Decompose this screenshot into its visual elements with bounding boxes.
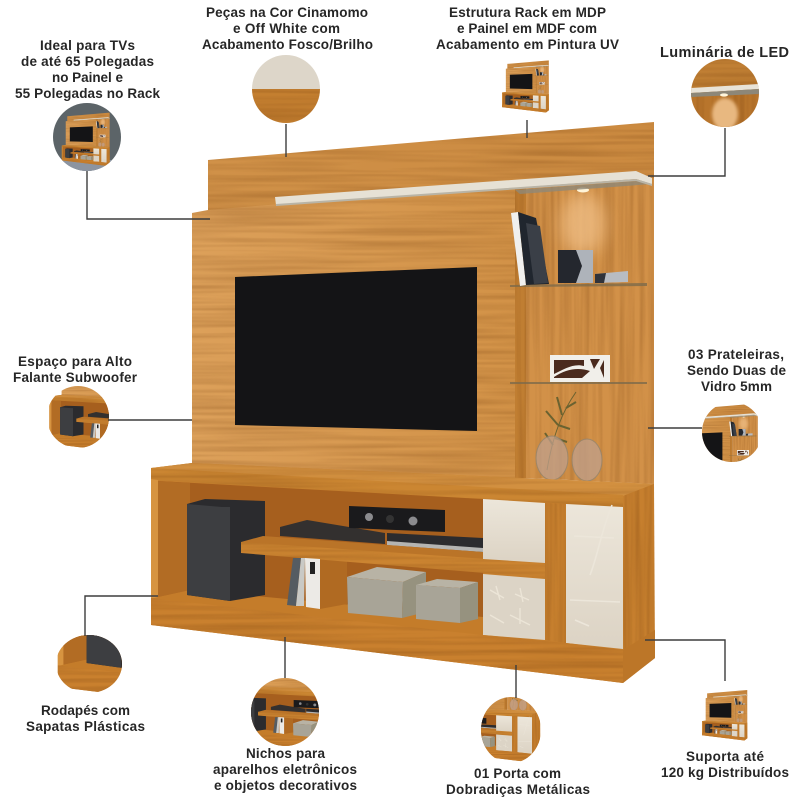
heading: 55 Polegadas no Rack: [15, 86, 160, 101]
books: [287, 558, 320, 609]
center speaker: [349, 506, 445, 532]
callout: Espaço para Alto Falante: [14, 356, 192, 448]
leader line: [285, 124, 287, 157]
heading: [661, 749, 789, 780]
base side: [623, 630, 655, 683]
shelves detail circle: [702, 404, 758, 462]
patterned box on lower shelf: [550, 355, 610, 382]
heading: Nichos para: [246, 746, 325, 761]
LED white shelf: [275, 171, 652, 206]
central divider: [320, 558, 347, 609]
furniture: TV panel and rack: [151, 122, 655, 683]
heading: e objetos decorativos: [214, 778, 357, 793]
glass vases: [536, 436, 602, 481]
leader line: [515, 665, 517, 698]
rack interior back: [158, 481, 483, 632]
lower wood panel: [192, 186, 516, 478]
callout: Peças na Cor Cinamomo: [202, 5, 373, 157]
LED light glow: [561, 188, 605, 256]
heading: aparelhos eletrônicos: [213, 762, 357, 777]
rack interior left wall: [158, 481, 190, 597]
shelf niche side strip: [515, 188, 526, 478]
storage box small: [416, 579, 478, 623]
subwoofer detail circle: [49, 386, 109, 448]
subwoofer: [187, 499, 265, 601]
heading: Falante Subwoofer: [13, 370, 138, 385]
centre shelf: [241, 536, 545, 578]
callout: Luminária de LED: [648, 45, 789, 176]
heading: e Off White com: [233, 21, 340, 36]
leader line: [645, 640, 725, 681]
heading: Suporta até: [686, 749, 764, 764]
heading: Rodapés com: [41, 703, 130, 718]
upper glass shelf: [510, 283, 647, 287]
cabinet side panel: [623, 484, 654, 650]
leader line: [108, 419, 192, 421]
media player: [280, 520, 483, 552]
product thumbnail: [502, 60, 549, 113]
callout: Ideal para TVs: [15, 38, 210, 219]
upper door: [483, 499, 545, 563]
leader line: [648, 427, 702, 429]
leader line: [284, 637, 286, 678]
upper wood panel: [208, 122, 654, 212]
heading: Luminária de LED: [660, 45, 789, 61]
heading: no Painel e: [52, 70, 123, 85]
heading: Dobradiças Metálicas: [446, 782, 590, 797]
lower glass shelf: [510, 382, 647, 384]
decorative vase block: [558, 250, 628, 283]
heading: 01 Porta com: [474, 766, 561, 781]
TV screen: [235, 267, 477, 431]
heading: Sendo Duas de: [687, 363, 786, 378]
heading: 03 Prateleiras,: [688, 347, 784, 362]
leader line: [648, 128, 725, 176]
leader line: [85, 596, 158, 636]
door detail circle: [481, 697, 540, 762]
base front: [151, 598, 623, 683]
callout: Nichos: [213, 637, 356, 793]
LED detail circle: [690, 58, 760, 130]
heading: [13, 354, 138, 385]
heading: [687, 347, 786, 394]
heading: Estrutura Rack em MDP: [449, 5, 606, 20]
photo circle: [53, 103, 121, 171]
heading: Sapatas Plásticas: [26, 719, 145, 734]
heading: Peças na Cor Cinamomo: [206, 5, 368, 20]
leader line: [526, 120, 528, 138]
rack floor: [151, 590, 483, 636]
finish sample circle: [250, 55, 322, 125]
callout: Suporta até: [645, 640, 789, 780]
callout: Rodapés: [26, 595, 158, 734]
callout: 01 Porta: [446, 665, 590, 797]
heading: Espaço para Alto: [18, 354, 132, 369]
heading: de até 65 Polegadas: [21, 54, 154, 69]
shelf niche back: [526, 178, 654, 484]
heading: [202, 5, 373, 52]
plant: [545, 392, 576, 470]
storage box large: [347, 567, 426, 618]
rack left edge: [151, 479, 158, 598]
heading: [15, 38, 160, 101]
heading: Acabamento Fosco/Brilho: [202, 37, 373, 52]
heading: [436, 5, 619, 52]
callout: Estrutura Rack: [436, 5, 619, 138]
tall glossy door: [566, 504, 623, 649]
heading: [446, 766, 590, 797]
heading: Vidro 5mm: [701, 379, 772, 394]
product thumbnail: [702, 690, 747, 740]
heading: 120 kg Distribuídos: [661, 765, 789, 780]
vertical wood strip: [545, 503, 566, 643]
niches detail circle: [251, 678, 319, 746]
rack top: [151, 463, 654, 496]
heading: [213, 746, 357, 793]
rack body backing: [151, 463, 655, 683]
plinth detail circle: [58, 635, 122, 692]
heading: Acabamento em Pintura UV: [436, 37, 619, 52]
heading: [26, 703, 145, 734]
books on upper shelf: [511, 212, 549, 286]
leader line: [87, 171, 210, 219]
rack top front edge: [151, 468, 623, 507]
callout: 03 Prateleiras: [648, 349, 786, 462]
lower door with pattern: [483, 574, 545, 640]
heading: Ideal para TVs: [40, 38, 135, 53]
heading: e Painel em MDF com: [457, 21, 597, 36]
